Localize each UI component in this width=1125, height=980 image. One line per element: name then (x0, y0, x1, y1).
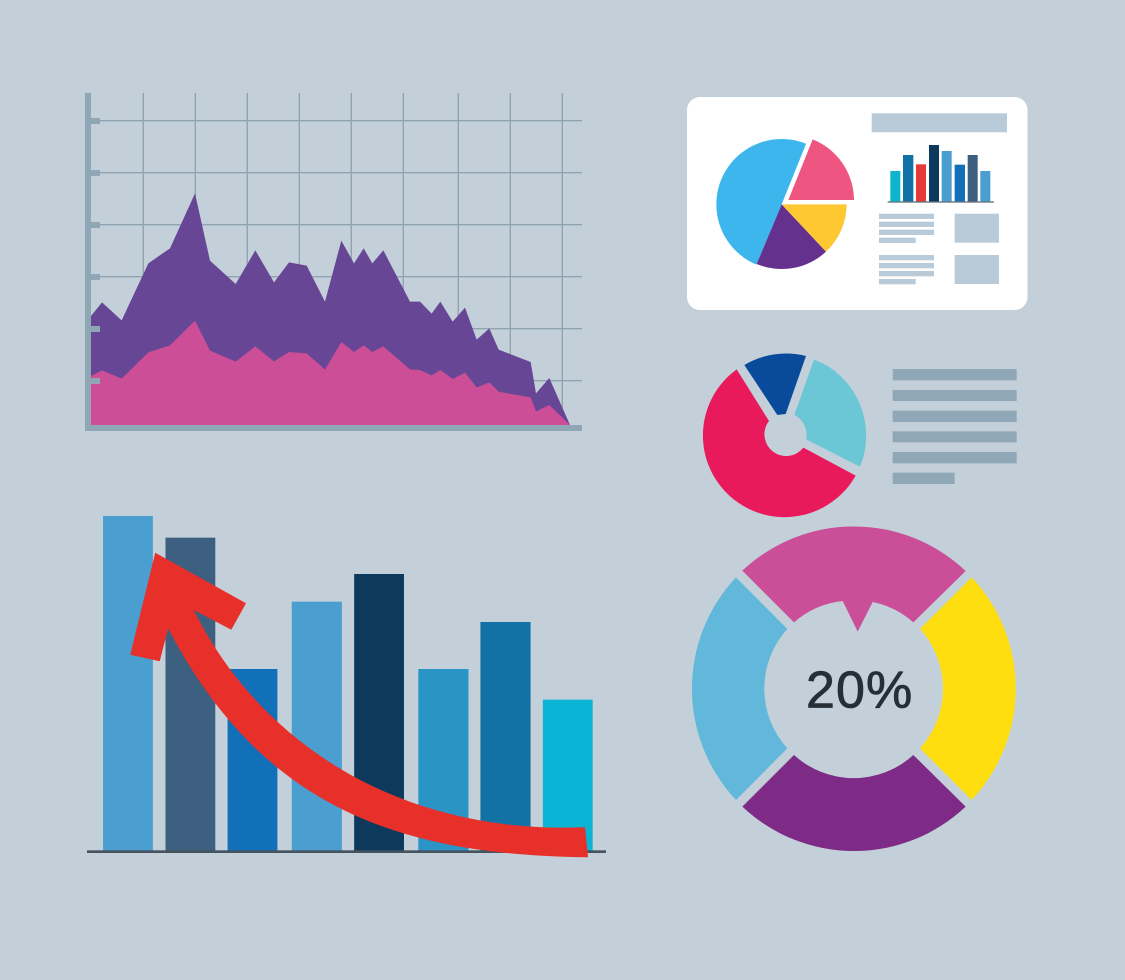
panel: ring chart with percentage (692, 526, 1016, 851)
panel: bar chart with rising arrow (87, 516, 606, 857)
panel: segmented donut with legend lines (703, 354, 1017, 517)
legend text lines (893, 369, 1017, 484)
panel: report card (687, 97, 1028, 310)
arrow: red curved (130, 553, 588, 857)
donut chart (703, 354, 866, 517)
area: pink series (91, 321, 570, 425)
panel: area chart (85, 93, 582, 431)
ring segments (692, 526, 1016, 851)
pie chart (716, 139, 854, 269)
mini bar chart (888, 145, 994, 203)
card text lines and thumbnails (879, 214, 999, 284)
percentage label: 20% (806, 662, 912, 720)
card title bar (872, 113, 1007, 132)
bars (87, 516, 606, 853)
area: purple series (91, 193, 570, 425)
chart axes and ticks (85, 93, 582, 431)
